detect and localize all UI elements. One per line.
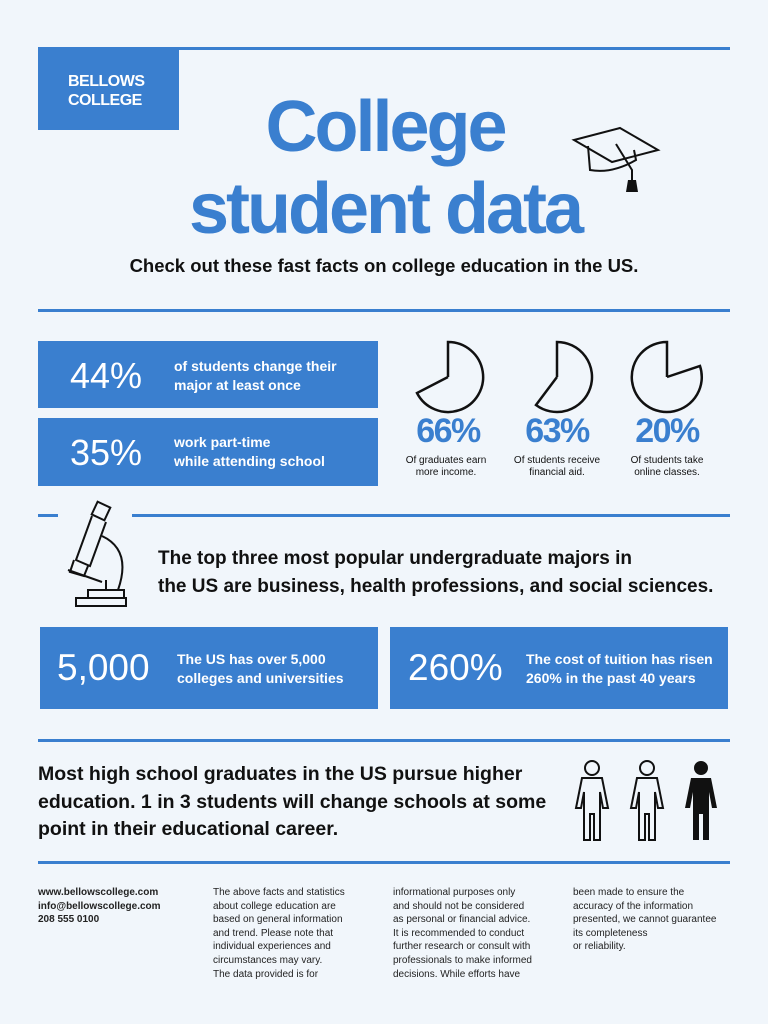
stat box 44%: 44% bbox=[70, 355, 142, 396]
title: College bbox=[265, 87, 505, 167]
footer disclaimer col 1: about college education are bbox=[213, 901, 336, 912]
footer disclaimer col 1 bbox=[213, 887, 345, 980]
icon: people bbox=[574, 760, 717, 841]
stat box 35% bbox=[38, 418, 378, 486]
stat box 35%: while attending school bbox=[174, 453, 325, 469]
higher ed text: point in their educational career. bbox=[38, 818, 338, 840]
footer disclaimer col 2: as personal or financial advice. bbox=[393, 914, 530, 925]
footer disclaimer col 2: informational purposes only bbox=[393, 887, 515, 898]
pie charts: more income. bbox=[416, 467, 476, 478]
pie charts: Of students receive bbox=[514, 455, 601, 466]
footer disclaimer col 3: presented, we cannot guarantee bbox=[573, 914, 716, 925]
box 260: 260% bbox=[408, 647, 503, 688]
icon: graduation cap bbox=[572, 126, 660, 192]
majors text: the US are business, health professions, and social sciences. bbox=[158, 576, 713, 597]
icon: microscope bbox=[68, 500, 127, 607]
title: student data bbox=[189, 169, 581, 249]
majors text bbox=[158, 548, 713, 597]
footer disclaimer col 3: its completeness bbox=[573, 928, 647, 939]
logo box: BELLOWS bbox=[68, 73, 144, 90]
majors text: The top three most popular undergraduate majors in bbox=[158, 548, 632, 569]
higher ed text: education. 1 in 3 students will change schools at some bbox=[38, 790, 546, 812]
footer disclaimer col 1: individual experiences and bbox=[213, 941, 331, 952]
footer disclaimer col 3 bbox=[573, 887, 716, 952]
footer contact: www.bellowscollege.com bbox=[38, 887, 158, 898]
footer contact: info@bellowscollege.com bbox=[38, 901, 161, 912]
higher ed text: Most high school graduates in the US pursue higher bbox=[38, 763, 522, 785]
footer disclaimer col 2: professionals to make informed bbox=[393, 955, 532, 966]
box 260: 260% in the past 40 years bbox=[526, 670, 696, 686]
stat box 35%: 35% bbox=[70, 432, 142, 473]
box 5000: colleges and universities bbox=[177, 670, 344, 686]
pie charts: online classes. bbox=[634, 467, 700, 478]
pie 63 bbox=[536, 342, 592, 412]
footer contact bbox=[38, 887, 161, 925]
footer disclaimer col 1: based on general information bbox=[213, 914, 343, 925]
box 5000 bbox=[40, 627, 378, 709]
footer disclaimer col 2: and should not be considered bbox=[393, 901, 524, 912]
box 260 bbox=[390, 627, 728, 709]
footer disclaimer col 1: The data provided is for bbox=[213, 969, 318, 980]
pie charts: financial aid. bbox=[529, 467, 585, 478]
footer contact: 208 555 0100 bbox=[38, 914, 99, 925]
pie 66 bbox=[417, 342, 483, 412]
footer disclaimer col 1: and trend. Please note that bbox=[213, 928, 333, 939]
logo box bbox=[38, 48, 179, 130]
pie charts: 66% bbox=[416, 412, 481, 450]
stat box 44%: major at least once bbox=[174, 377, 301, 393]
footer disclaimer col 1: circumstances may vary. bbox=[213, 955, 322, 966]
box 260: The cost of tuition has risen bbox=[526, 651, 713, 667]
footer disclaimer col 2: It is recommended to conduct bbox=[393, 928, 524, 939]
pie charts bbox=[406, 340, 704, 478]
stat box 44%: of students change their bbox=[174, 358, 337, 374]
stat box 44% bbox=[38, 341, 378, 408]
footer disclaimer col 1: The above facts and statistics bbox=[213, 887, 345, 898]
footer disclaimer col 3: accuracy of the information bbox=[573, 901, 693, 912]
footer disclaimer col 3: or reliability. bbox=[573, 941, 626, 952]
higher ed text bbox=[38, 763, 546, 840]
pie charts: 20% bbox=[635, 412, 700, 450]
footer disclaimer col 2 bbox=[393, 887, 532, 980]
subtitle: Check out these fast facts on college education in the US. bbox=[130, 255, 638, 276]
box 5000: The US has over 5,000 bbox=[177, 651, 326, 667]
footer disclaimer col 2: further research or consult with bbox=[393, 941, 530, 952]
pie charts: Of students take bbox=[631, 455, 704, 466]
pie charts: Of graduates earn bbox=[406, 455, 486, 466]
logo box: COLLEGE bbox=[68, 92, 142, 109]
footer disclaimer col 3: been made to ensure the bbox=[573, 887, 684, 898]
title bbox=[189, 87, 584, 249]
stat box 35%: work part-time bbox=[174, 434, 270, 450]
box 5000: 5,000 bbox=[57, 647, 150, 688]
pie charts: 63% bbox=[525, 412, 590, 450]
footer disclaimer col 2: decisions. While efforts have bbox=[393, 969, 520, 980]
pie 20 bbox=[632, 342, 702, 412]
